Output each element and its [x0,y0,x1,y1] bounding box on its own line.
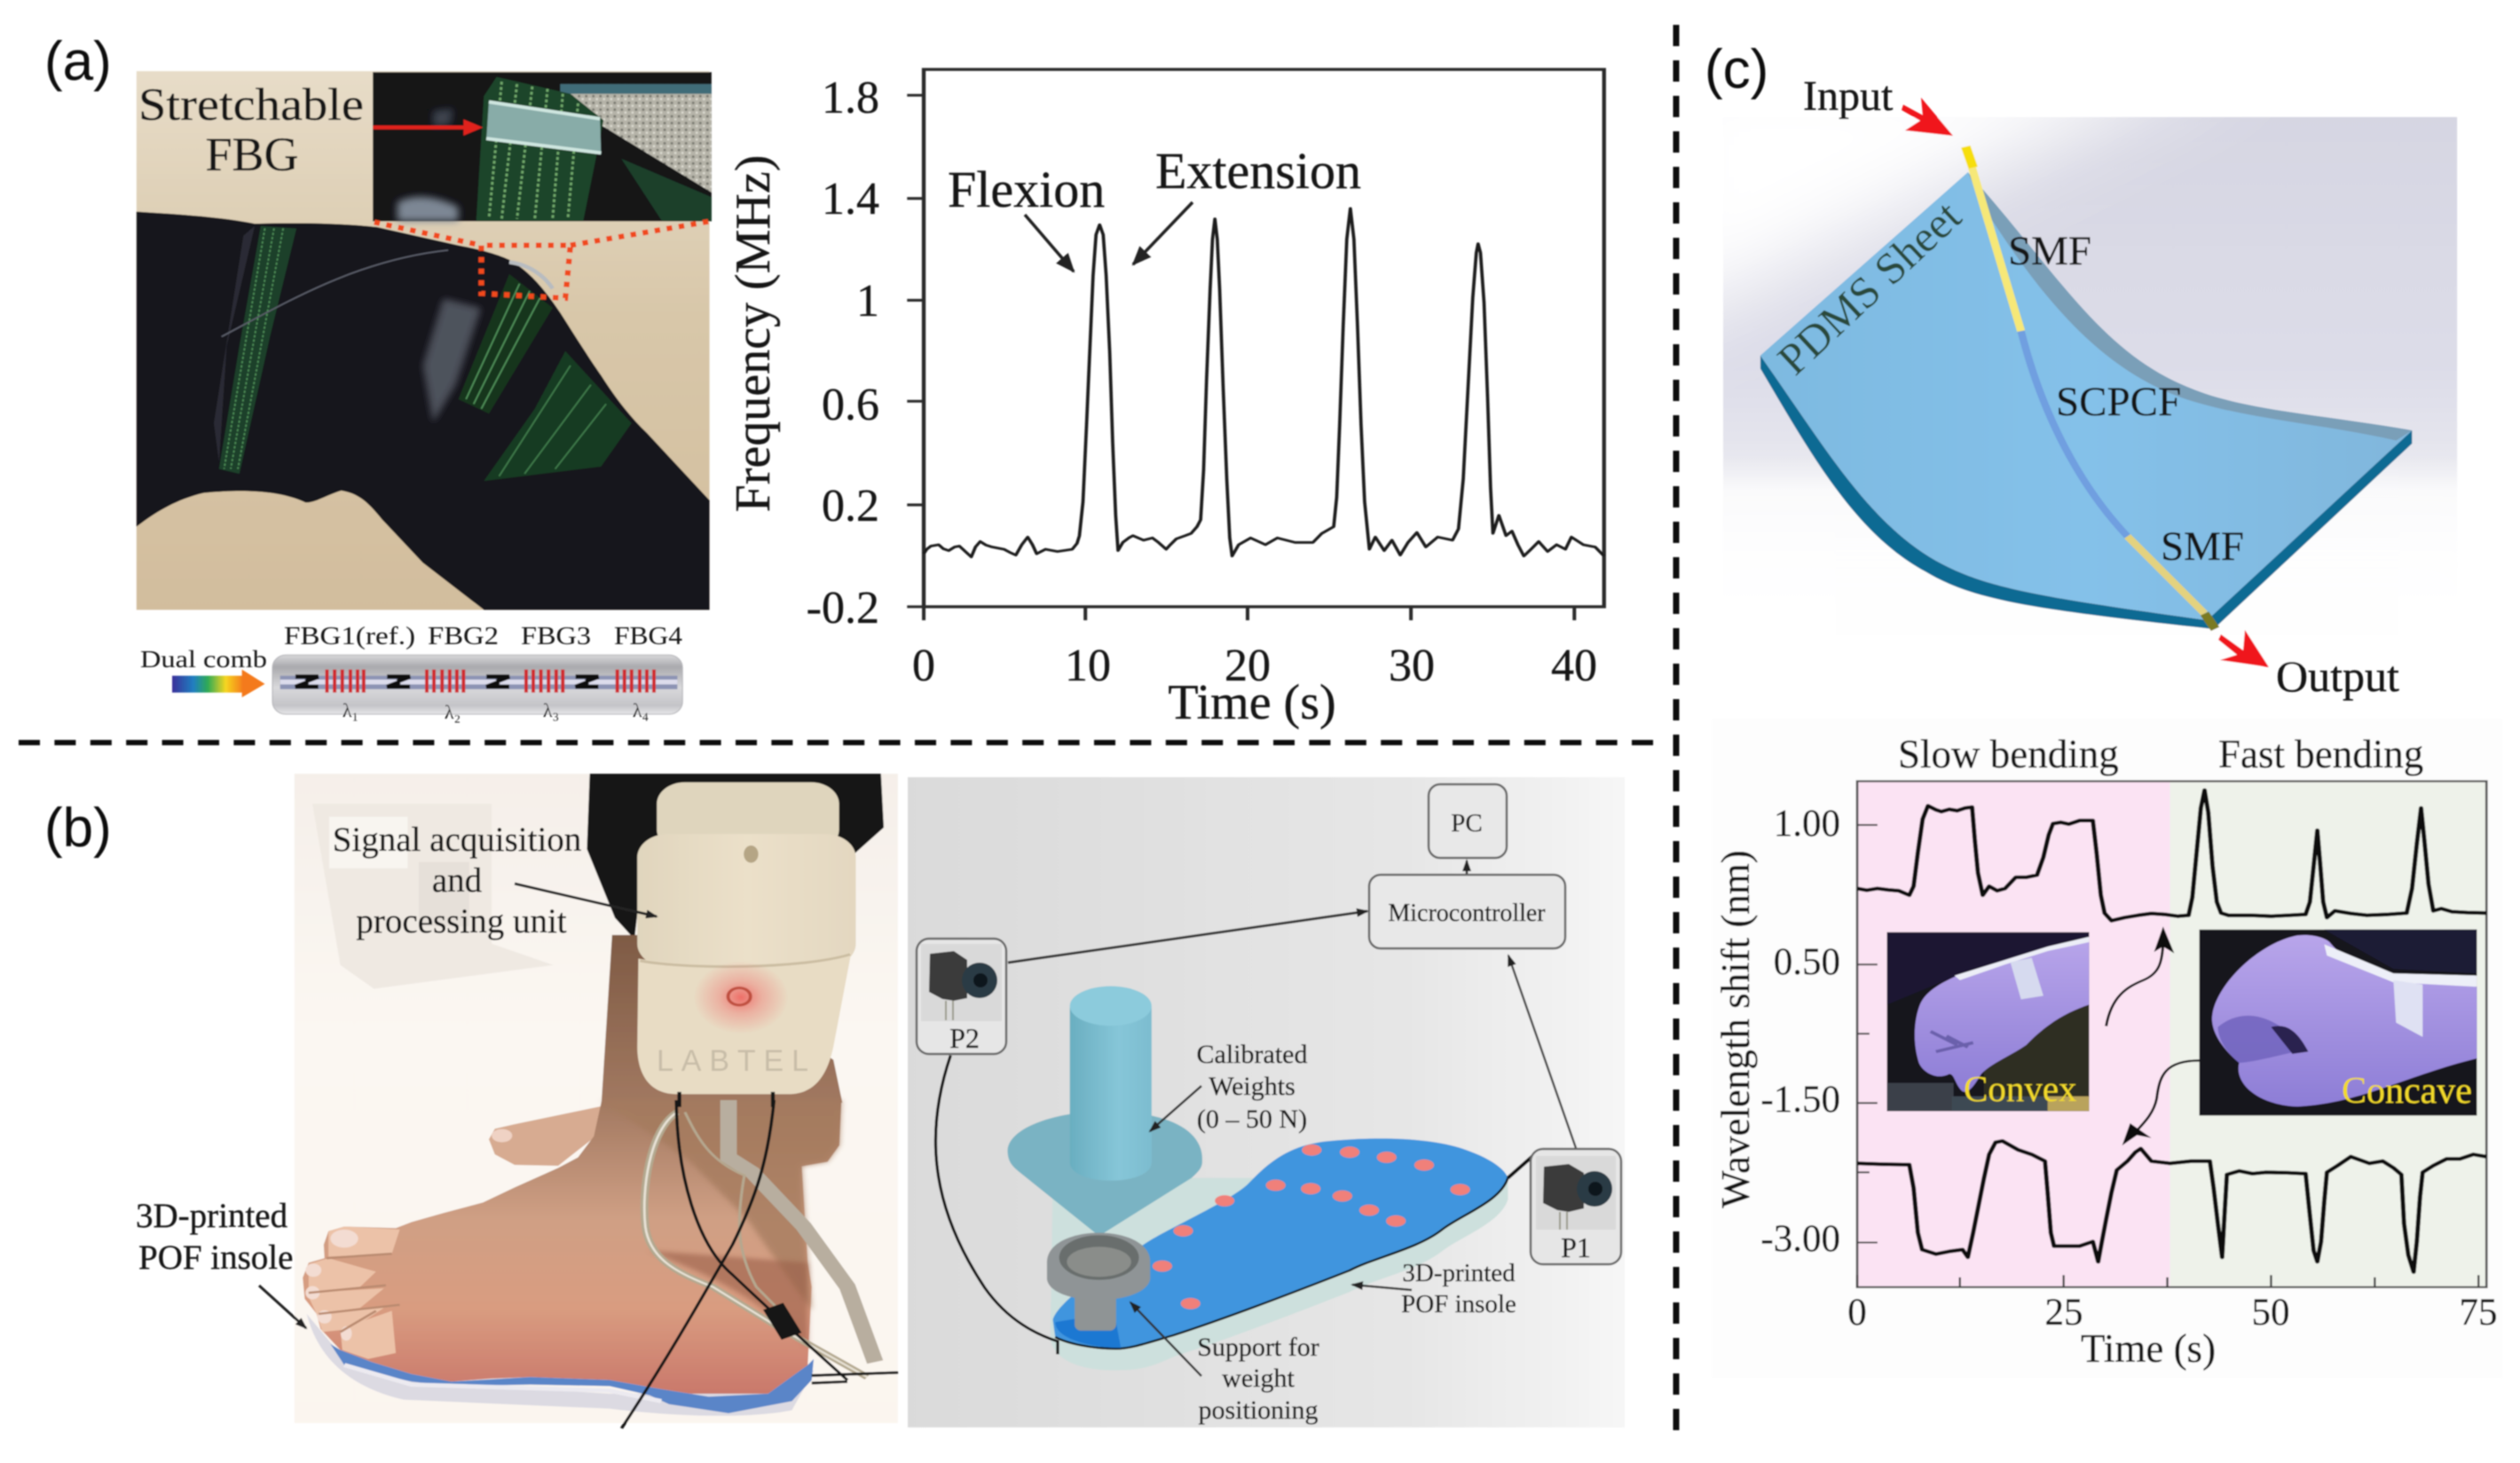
arrow: input [1902,98,1953,136]
FBG labels: λ₃ [543,699,559,721]
box: photodetector P2: P2 [949,1022,980,1054]
panel label (c): (c) [1705,39,1768,100]
fibre and sheet labels: PDMS Sheet [1768,191,1971,384]
label: support for weight positioning: Support for [1197,1333,1319,1362]
panel label (a): (a) [44,31,112,92]
label: Stretchable FBG: Stretchable [138,80,364,130]
y axis ticks: -3.00 [1760,1218,1840,1260]
panel a: knee photo with stretchable FBG [137,71,712,610]
FBG labels: λ₄ [633,699,649,721]
x axis ticks: 50 [2252,1292,2289,1333]
label: signal acquisition unit: and [432,861,483,900]
box: photodetector P1 [1531,1149,1621,1264]
label: support for weight positioning: weight [1222,1364,1295,1393]
x axis ticks: 0 [1847,1292,1867,1333]
diagram: dual comb and FBG array [140,623,682,723]
x axis title: Time (s) [2081,1326,2216,1371]
label: 3D-printed POF insole: POF insole [138,1239,293,1277]
x axis ticks: 40 [1551,641,1597,691]
box: Microcontroller: Microcontroller [1388,900,1546,927]
box: Microcontroller [1369,875,1565,948]
y axis ticks: 0.6 [822,380,879,430]
x axis ticks: 10 [1065,641,1111,691]
FBG labels: FBG1(ref.) [284,623,415,650]
chart: frequency vs time [726,69,1604,730]
inset photo: convex glove: Convex [1964,1068,2077,1109]
FBG labels: λ₂ [445,701,461,723]
arrow: microcontroller to PC [1466,861,1468,874]
label: support for weight positioning [1130,1302,1319,1425]
y axis ticks: -1.50 [1760,1079,1840,1121]
fibre and sheet labels: SMF [2161,523,2244,570]
FBG labels [140,623,682,723]
box: PC: PC [1451,809,1483,838]
FBG labels: FBG3 [521,623,591,650]
y axis ticks: 1 [856,276,879,326]
device lettering: LABTEL [657,1044,808,1078]
label: signal acquisition unit [333,821,657,940]
x axis ticks: 30 [1389,641,1435,691]
y axis ticks [807,73,879,633]
label: signal acquisition unit: processing unit [356,902,567,940]
x axis ticks: 0 [912,641,935,691]
fibre and sheet labels: SCPCF [2056,379,2181,425]
chart headings [1898,732,2423,776]
label: support for weight positioning: positioning [1198,1396,1319,1425]
panel b: foot photo with insole and acquisition unit [136,774,898,1428]
x axis title: Time (s) [1168,675,1336,730]
y axis ticks: 1.00 [1774,803,1840,845]
arrow: P1 to microcontroller [1508,956,1576,1148]
y axis ticks: 1.8 [822,73,879,123]
box: photodetector P1: P1 [1561,1231,1591,1263]
x axis ticks [912,641,1597,691]
label: signal acquisition unit: Signal acquisition [333,821,581,859]
y axis ticks: -0.2 [807,583,879,633]
label: calibrated weights: Weights [1209,1072,1295,1101]
label: Stretchable FBG: FBG [205,128,299,181]
label: 3D-printed POF insole [136,1197,306,1328]
y axis ticks: 0.2 [822,481,879,531]
x axis ticks: 20 [1225,641,1271,691]
label: 3D-printed POF insole: POF insole [1401,1290,1516,1318]
panel c: wavelength shift chart [1712,719,2502,1378]
label: calibrated weights [1150,1040,1307,1134]
divider: horizontal dashed [19,740,1654,745]
label: 3D-printed POF insole: 3D-printed [1402,1259,1516,1287]
arrow: P2 to microcontroller [1008,911,1367,963]
label: calibrated weights: (0 – 50 N) [1197,1105,1307,1134]
FBG labels: FBG2 [428,623,499,650]
label: 3D-printed POF insole: 3D-printed [136,1197,288,1235]
divider: vertical dashed [1673,25,1679,1439]
inset photo: convex glove [1887,932,2089,1111]
annotation: Flexion: Flexion [948,161,1105,218]
panel b: insole calibration schematic [908,777,1625,1428]
y axis ticks: 0.50 [1774,941,1840,983]
arrow: concave to lower trace [2122,1060,2200,1145]
panel c: PDMS sheet schematic [1723,81,2458,702]
y axis ticks [1760,803,1840,1260]
x axis ticks: 75 [2460,1292,2497,1333]
annotation: Extension: Extension [1155,142,1361,200]
FBG labels: FBG4 [614,623,682,650]
annotation: Extension [1133,142,1361,264]
inset photo: concave glove [2200,930,2477,1115]
y axis ticks: 1.4 [822,174,879,224]
y axis title: Frequency (MHz) [726,155,781,512]
FBG labels: Dual comb [140,646,267,673]
panel label (b): (b) [44,798,112,859]
y axis title: Wavelength shift (nm) [1713,850,1758,1208]
label: 3D-printed POF insole [1352,1259,1516,1318]
label: Stretchable FBG [138,80,364,181]
chart headings: Slow bending [1898,732,2119,776]
box: photodetector P2 [917,939,1006,1054]
arrow: convex to slow bending [2107,926,2174,1026]
chart headings: Fast bending [2218,732,2423,776]
fibre and sheet labels [1768,73,2399,701]
fibre and sheet labels: Output [2276,651,2399,701]
fibre and sheet labels: SMF [2008,228,2091,274]
x axis ticks: 25 [2044,1292,2083,1333]
box: PC [1429,784,1507,858]
fibre and sheet labels: Input [1803,73,1894,120]
arrow: output [2218,630,2269,667]
annotation: Flexion [948,161,1105,271]
x axis ticks [1847,1292,2497,1333]
FBG labels: λ₁ [343,699,358,721]
inset photo: concave glove: Concave [2342,1071,2472,1112]
label: calibrated weights: Calibrated [1197,1040,1307,1069]
